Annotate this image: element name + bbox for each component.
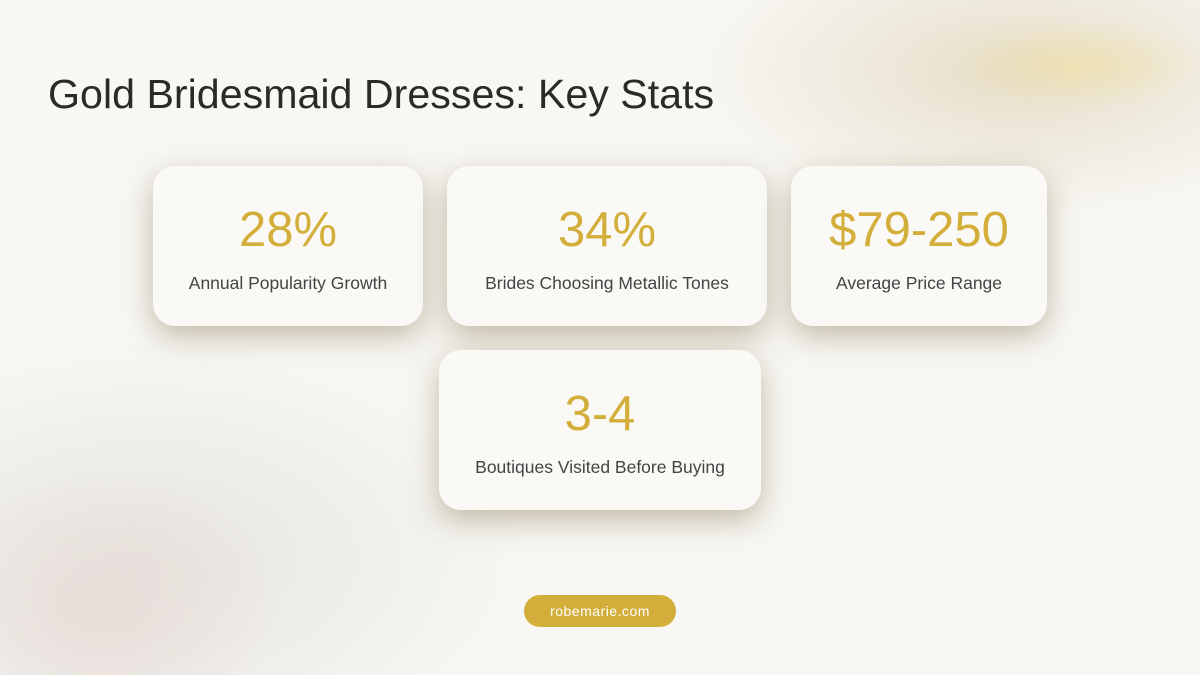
footer pill: robemarie.com (550, 603, 650, 619)
card: annual popularity growth (153, 166, 423, 326)
stat number: 28% (239, 203, 337, 257)
card: brides choosing metallic tones (447, 166, 767, 326)
card: boutiques visited (439, 350, 761, 510)
title: Gold Bridesmaid Dresses: Key Stats (48, 71, 714, 117)
stat label: Average Price Range (836, 273, 1002, 293)
footer pill (524, 595, 676, 627)
stat label: Brides Choosing Metallic Tones (485, 273, 729, 293)
stat label: Annual Popularity Growth (189, 273, 387, 293)
card: average price range (791, 166, 1047, 326)
stat number: 34% (558, 203, 656, 257)
stat number: 3-4 (565, 387, 635, 441)
stat number: $79-250 (829, 203, 1009, 257)
stat label: Boutiques Visited Before Buying (475, 457, 725, 477)
